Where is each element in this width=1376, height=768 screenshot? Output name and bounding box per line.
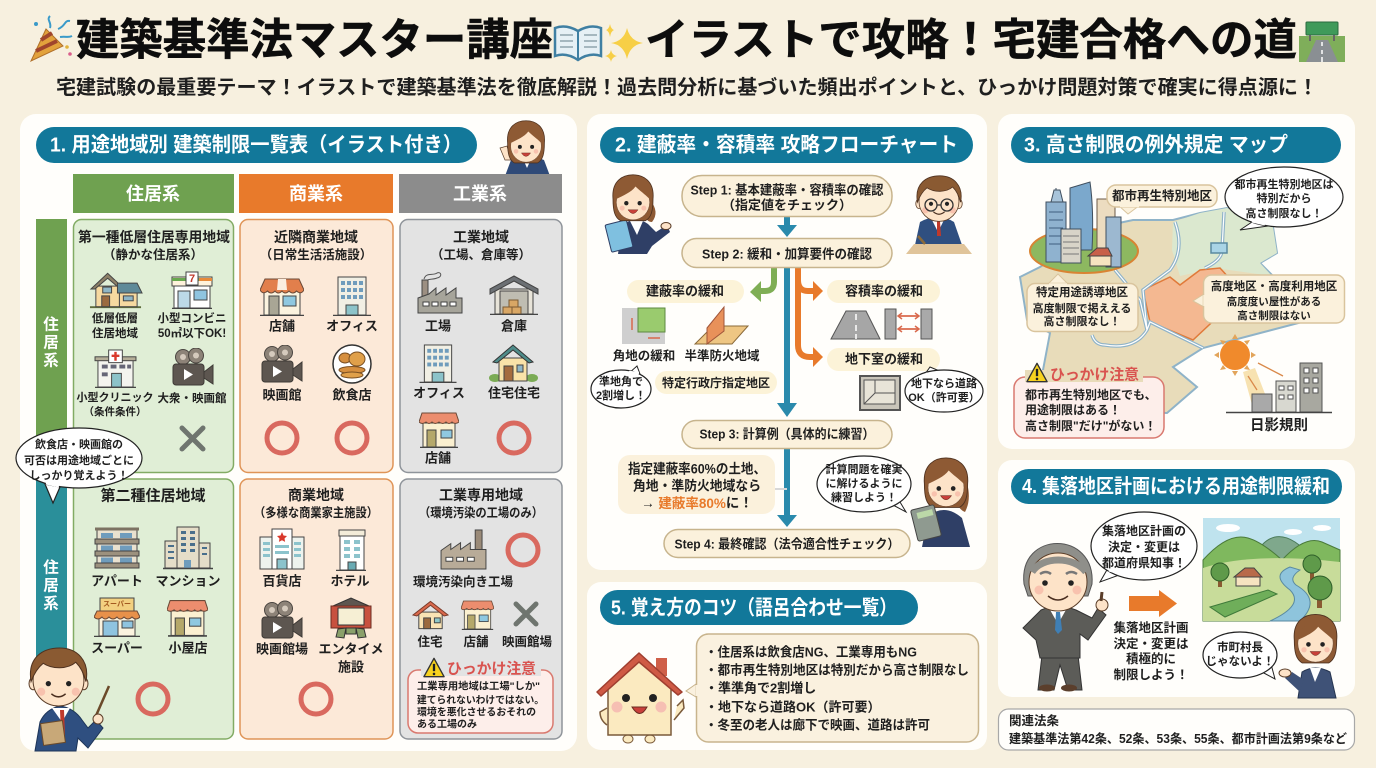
speech bubble: food and cinema: しっかり覚えよう！ <box>30 468 128 482</box>
speech bubble: food and cinema: 可否は用途地域ごとに <box>24 453 134 467</box>
cell: first-class low-rise residential: 小型コンビニ <box>158 311 226 325</box>
speech bubble: basement: OK（許可要） <box>908 390 980 404</box>
cell: first-class low-rise residential <box>74 220 234 472</box>
callout: height district: 高度地区・高度利用地区 <box>1211 279 1338 293</box>
speech bubble: food and cinema: 飲食店・映画館の <box>35 437 123 451</box>
mark: allowed <box>508 535 538 565</box>
step 1 <box>682 176 892 216</box>
panel: 5 memory tips <box>587 582 987 750</box>
cell: first-class low-rise residential: 小型クリニック <box>76 391 154 404</box>
row label: residential 1: 居 <box>43 334 59 352</box>
cell: neighbourhood commercial: 映画館 <box>262 388 302 402</box>
speech bubble: basement: 地下なら道路 <box>911 376 977 390</box>
flow: connector arrows <box>750 217 823 527</box>
icon: apartment <box>95 528 139 568</box>
cell: commercial zone: 施設 <box>338 660 364 674</box>
heading: section 1: 1. 用途地域別 建築制限一覧表（イラスト付き） <box>50 134 462 156</box>
step 2: Step 2: 緩和・加算要件の確認 <box>702 246 872 262</box>
callout: trap warning <box>408 658 553 733</box>
speech bubble: no height limit <box>1225 167 1343 230</box>
callout: trap warning: ひっかけ注意 <box>1050 366 1139 384</box>
icon: convenience store <box>172 272 212 308</box>
panel: 1 usage zone table <box>16 114 577 751</box>
calculation example: 指定建蔽率60%の土地、 <box>628 460 766 476</box>
cell: industrial zone: オフィス <box>413 386 465 400</box>
cell: industrial zone: （工場、倉庫等） <box>431 247 531 262</box>
cell: first-class low-rise residential: （静かな住居系） <box>103 247 203 262</box>
character: man with glasses at desk <box>906 176 972 254</box>
cell: exclusive industrial zone: 住宅 <box>417 634 443 649</box>
callout: trap warning: 都市再生特別地区でも、 <box>1025 387 1157 402</box>
speech bubble: corner bonus: 2割増し！ <box>596 388 646 402</box>
footer: related law articles: 関連法条 <box>1009 713 1060 728</box>
cell: neighbourhood commercial: 飲食店 <box>332 388 372 402</box>
callout: trap warning <box>1014 363 1164 438</box>
cell: industrial zone: 工業地域 <box>453 229 509 245</box>
icon: highway <box>1299 22 1345 62</box>
speech bubble: not mayors: じゃないよ！ <box>1206 655 1274 668</box>
arrow: orange <box>1129 590 1177 617</box>
cell: industrial zone: 工場 <box>425 318 451 334</box>
calculation example: 角地・準防火地域なら <box>633 478 761 494</box>
arrow: green to coverage relaxation <box>750 268 774 302</box>
cell: neighbourhood commercial <box>240 220 393 472</box>
speech bubble: corner bonus <box>591 366 651 408</box>
illustration: rural landscape <box>1203 518 1340 621</box>
label: basement relaxation <box>827 348 940 371</box>
heading: section 3: 3. 高さ制限の例外規定 マップ <box>1024 134 1288 156</box>
calculation example: → 建蔽率80%に！ <box>641 496 753 510</box>
label: FAR relaxation <box>827 280 940 303</box>
step 4: Step 4: 最終確認（法令適合性チェック） <box>674 536 900 552</box>
cell: first-class low-rise residential: （条件条件） <box>84 405 146 418</box>
icon: basement <box>860 376 900 410</box>
row label: residential 2: 居 <box>43 578 59 594</box>
heading: section 2 <box>600 127 973 163</box>
speech bubble: no height limit: 都市再生特別地区は <box>1234 177 1334 191</box>
cell: exclusive industrial zone: 店舗 <box>463 634 489 649</box>
cell: exclusive industrial zone <box>400 479 562 739</box>
row label: residential 1 <box>36 219 67 479</box>
callout: trap warning: 用途制限はある！ <box>1025 402 1121 417</box>
icon: semi-fireproof zone <box>695 307 748 344</box>
subtitle: 宅建試験の最重要テーマ！イラストで建築基準法を徹底解説！過去問分析に基づいた頻出ポイントと、ひっかけ問題対策で確実に得点源に！ <box>56 76 1318 99</box>
step 3: Step 3: 計算例（具体的に練習） <box>700 426 874 442</box>
cell: first-class low-rise residential: 低層低層 <box>92 311 138 325</box>
character: woman pointing <box>500 121 550 176</box>
list: mnemonics: ・地下なら道路OK（許可要） <box>705 700 881 714</box>
callout: urban renewal district: 都市再生特別地区 <box>1112 188 1212 203</box>
title: 建築基準法マスター講座 <box>76 17 553 65</box>
speech bubble: governor decides: 決定・変更は <box>1108 539 1180 554</box>
character: teacher with pointer <box>29 648 109 751</box>
icon: road <box>831 311 880 339</box>
speech bubble: not mayors <box>1203 632 1277 679</box>
cell: second-class residential: スーパー <box>91 640 143 656</box>
heading: section 2: 2. 建蔽率・容積率 攻略フローチャート <box>615 132 958 156</box>
note: plan restriction: 決定・変更は <box>1113 636 1189 651</box>
label: designated district: 特定行政庁指定地区 <box>662 375 770 390</box>
note: plan restriction: 積極的に <box>1126 651 1176 666</box>
icon: shop <box>461 601 494 629</box>
cell: commercial zone: エンタイメ <box>318 642 384 656</box>
cell: commercial zone: 商業地域 <box>288 487 344 503</box>
heading: section 4: 4. 集落地区計画における用途制限緩和 <box>1022 475 1330 498</box>
footer: related law articles: 建築基準法第42条、52条、53条、55条、都市計画法第9条など <box>1009 731 1347 746</box>
column header: industrial <box>399 174 562 213</box>
cell: exclusive industrial zone: 工業専用地域 <box>439 487 523 503</box>
speech bubble: governor decides <box>1091 512 1197 582</box>
column header: residential: 住居系 <box>126 184 180 204</box>
column header: industrial: 工業系 <box>453 184 507 204</box>
illustration: sun and shadow regulation <box>1214 334 1332 434</box>
icon: entertainment venue <box>331 598 371 638</box>
label: coverage relaxation <box>627 280 744 303</box>
character: woman presenting <box>1279 614 1337 698</box>
column header: commercial <box>239 174 393 213</box>
icon: cinema camera <box>262 601 302 638</box>
callout: urban renewal district <box>1107 185 1217 214</box>
speech bubble: governor decides: 都道府県知事！ <box>1102 555 1186 570</box>
icon: office <box>333 277 371 316</box>
note: plan restriction: 集落地区計画 <box>1113 620 1189 635</box>
cell: second-class residential: マンション <box>155 574 221 588</box>
callout: trap warning: 環境を悪化させるおそれの <box>417 706 536 718</box>
arrow: orange to FAR and basement <box>798 268 823 367</box>
cell: exclusive industrial zone: 環境汚染向き工場 <box>413 574 513 589</box>
icon: cinema camera <box>262 345 302 382</box>
mark: allowed <box>138 684 168 714</box>
step 3 <box>682 420 892 448</box>
cell: first-class low-rise residential: 第一種低層住居専用地域 <box>78 229 230 245</box>
cell: commercial zone: （多様な商業家主施設） <box>254 505 378 520</box>
icon: shop <box>419 413 459 448</box>
callout: special use guidance district: 高度制限で掲ええる <box>1033 301 1131 315</box>
icon: department store <box>260 529 304 569</box>
list: mnemonics: ・準準角で2割増し <box>705 680 816 696</box>
icon: factory <box>418 273 462 313</box>
icon: cinema camera <box>173 348 213 385</box>
speech bubble: no height limit: 特別だから <box>1256 191 1312 205</box>
icon: home <box>489 345 538 382</box>
icon: house <box>90 273 142 307</box>
list: mnemonics <box>686 634 978 742</box>
mark: allowed store <box>267 423 297 453</box>
callout: trap warning: ひっかけ注意 <box>447 660 536 678</box>
heading: section 5: 5. 覚え方のコツ（語呂合わせ一覧） <box>611 596 897 620</box>
character: senior man pointing <box>1023 544 1108 692</box>
icon: condominium <box>163 527 213 568</box>
cell: commercial zone: ホテル <box>330 574 370 588</box>
map: districts <box>1020 208 1340 413</box>
step 1: （指定値をチェック） <box>722 198 852 212</box>
panel: 2 coverage and FAR flowchart <box>587 114 987 570</box>
arrow: step 3 to step 4 <box>777 449 797 527</box>
icon: open book <box>555 27 601 60</box>
callout: height district: 高さ制限はない <box>1237 309 1311 322</box>
icon: supermarket <box>94 598 140 636</box>
icon: warehouse <box>490 276 538 314</box>
icon: corner lot <box>622 308 665 344</box>
list: mnemonics: ・冬至の老人は廊下で映画、道路は許可 <box>705 718 930 732</box>
speech bubble: corner bonus: 準地角で <box>599 374 643 388</box>
step 4 <box>664 530 910 558</box>
callout: special use guidance district: 特定用途誘導地区 <box>1036 285 1128 299</box>
speech bubble: not mayors: 市町村長 <box>1217 640 1263 654</box>
icon: party popper <box>31 16 72 61</box>
label: FAR relaxation: 容積率の緩和 <box>845 284 923 298</box>
speech bubble: practice: 計算問題を確実 <box>826 462 902 476</box>
speech bubble: practice <box>817 456 911 512</box>
cell: neighbourhood commercial: （日常生活活施設） <box>260 247 372 262</box>
column header: residential <box>73 174 234 213</box>
mark: allowed <box>499 423 529 453</box>
heading: section 4 <box>1011 469 1342 504</box>
callout: height district: 高度度い屋性がある <box>1227 295 1321 308</box>
character: woman with calculator <box>910 458 970 547</box>
column header: commercial: 商業系 <box>289 184 343 204</box>
illustration: sun and shadow regulation: 日影規則 <box>1250 416 1308 434</box>
panel: 2 coverage and FAR flowchart: 半準防火地域 <box>684 348 760 363</box>
mark: allowed food <box>337 423 367 453</box>
cell: first-class low-rise residential: 50㎡以下OK! <box>158 327 226 340</box>
callout: special use guidance district: 高さ制限なし！ <box>1044 314 1120 328</box>
row label: residential 1: 住 <box>43 314 59 334</box>
arrow: main line to step 3 <box>777 268 797 417</box>
icon: clinic <box>95 350 136 388</box>
title <box>31 16 1345 65</box>
icon: house mascot <box>597 653 684 743</box>
mark: not allowed <box>182 428 203 449</box>
heading: section 5 <box>600 590 918 625</box>
panel: 2 coverage and FAR flowchart: 角地の緩和 <box>613 348 675 363</box>
cell: industrial zone: 倉庫 <box>501 318 527 334</box>
cell: industrial zone: 店舗 <box>425 450 451 466</box>
icon: factory <box>441 530 486 569</box>
cell: commercial zone: 映画館場 <box>256 642 308 656</box>
mark: not allowed <box>516 604 536 624</box>
cell: commercial zone: 百貨店 <box>262 574 302 588</box>
label: basement relaxation: 地下室の緩和 <box>845 352 923 366</box>
cell: second-class residential: アパート <box>91 574 143 588</box>
calculation example <box>618 455 787 514</box>
callout: height district <box>1193 275 1344 323</box>
cell: second-class residential <box>74 479 234 739</box>
speech bubble: practice: 練習しよう！ <box>831 490 897 504</box>
speech bubble: governor decides: 集落地区計画の <box>1102 523 1186 538</box>
cell: second-class residential: 第二種住居地域 <box>100 486 206 504</box>
heading: section 3 <box>1011 127 1341 163</box>
cell: exclusive industrial zone: （環境汚染の工場のみ） <box>419 505 543 520</box>
cell: neighbourhood commercial: 近隣商業地域 <box>274 229 358 245</box>
illustration: urban renewal district buildings <box>1030 182 1138 273</box>
callout: trap warning: 高さ制限"だけ"がない！ <box>1025 418 1156 433</box>
row label: residential 2: 住 <box>43 558 59 576</box>
panel: 3 height limit map <box>998 114 1355 449</box>
cell: neighbourhood commercial: 店舗 <box>269 318 295 334</box>
icon: hotel <box>336 530 366 570</box>
list: mnemonics: ・都市再生特別地区は特別だから高さ制限なし <box>705 662 969 678</box>
icon: sparkles <box>605 24 643 62</box>
icon: store <box>260 279 304 316</box>
speech bubble: practice: に解けるように <box>826 476 902 490</box>
icon: small shop <box>167 601 208 636</box>
row label: residential 2 <box>36 479 67 679</box>
title: イラストで攻略！宅建合格への道 <box>645 17 1297 65</box>
cell: industrial zone: 住宅住宅 <box>488 386 540 400</box>
speech bubble: food and cinema <box>16 428 142 503</box>
cell: industrial zone <box>400 220 562 472</box>
cell: first-class low-rise residential: 大衆・映画館 <box>158 391 227 405</box>
callout: trap warning: 建てられないわけではない。 <box>417 694 544 706</box>
callout: special use guidance district <box>1027 274 1138 332</box>
list: mnemonics: ・住居系は飲食店NG、工業専用もNG <box>705 644 917 660</box>
arrow: step 1 to step 2 <box>777 217 797 237</box>
cell: second-class residential: 小屋店 <box>168 640 208 656</box>
note: plan restriction <box>1113 620 1189 682</box>
speech bubble: basement <box>905 367 983 412</box>
icon: house <box>413 601 448 629</box>
label: coverage relaxation: 建蔽率の緩和 <box>646 284 724 298</box>
heading: section 1 <box>36 127 477 163</box>
step 1: Step 1: 基本建蔽率・容積率の確認 <box>690 182 884 198</box>
icon: food <box>333 345 371 383</box>
footer: related law articles <box>998 709 1354 750</box>
cell: commercial zone <box>240 479 393 739</box>
note: plan restriction: 制限しよう！ <box>1113 668 1189 682</box>
mark: allowed <box>301 684 331 714</box>
label: designated district <box>655 371 777 394</box>
icon: building setback <box>885 309 932 339</box>
speech bubble: no height limit: 高さ制限なし！ <box>1246 206 1322 220</box>
row label: residential 1: 系 <box>43 352 59 370</box>
cell: exclusive industrial zone: 映画館場 <box>502 634 552 649</box>
row label: residential 2: 系 <box>43 594 59 612</box>
step 2 <box>682 238 892 268</box>
character: woman with clipboard <box>605 175 671 254</box>
cell: neighbourhood commercial: オフィス <box>326 318 378 334</box>
callout: trap warning: 工業専用地域は工場"しか" <box>417 680 540 692</box>
cell: first-class low-rise residential: 住居地域 <box>92 326 138 340</box>
panel: 4 village district plan <box>998 460 1355 698</box>
icon: office <box>419 345 457 383</box>
callout: trap warning: ある工場のみ <box>417 718 477 730</box>
